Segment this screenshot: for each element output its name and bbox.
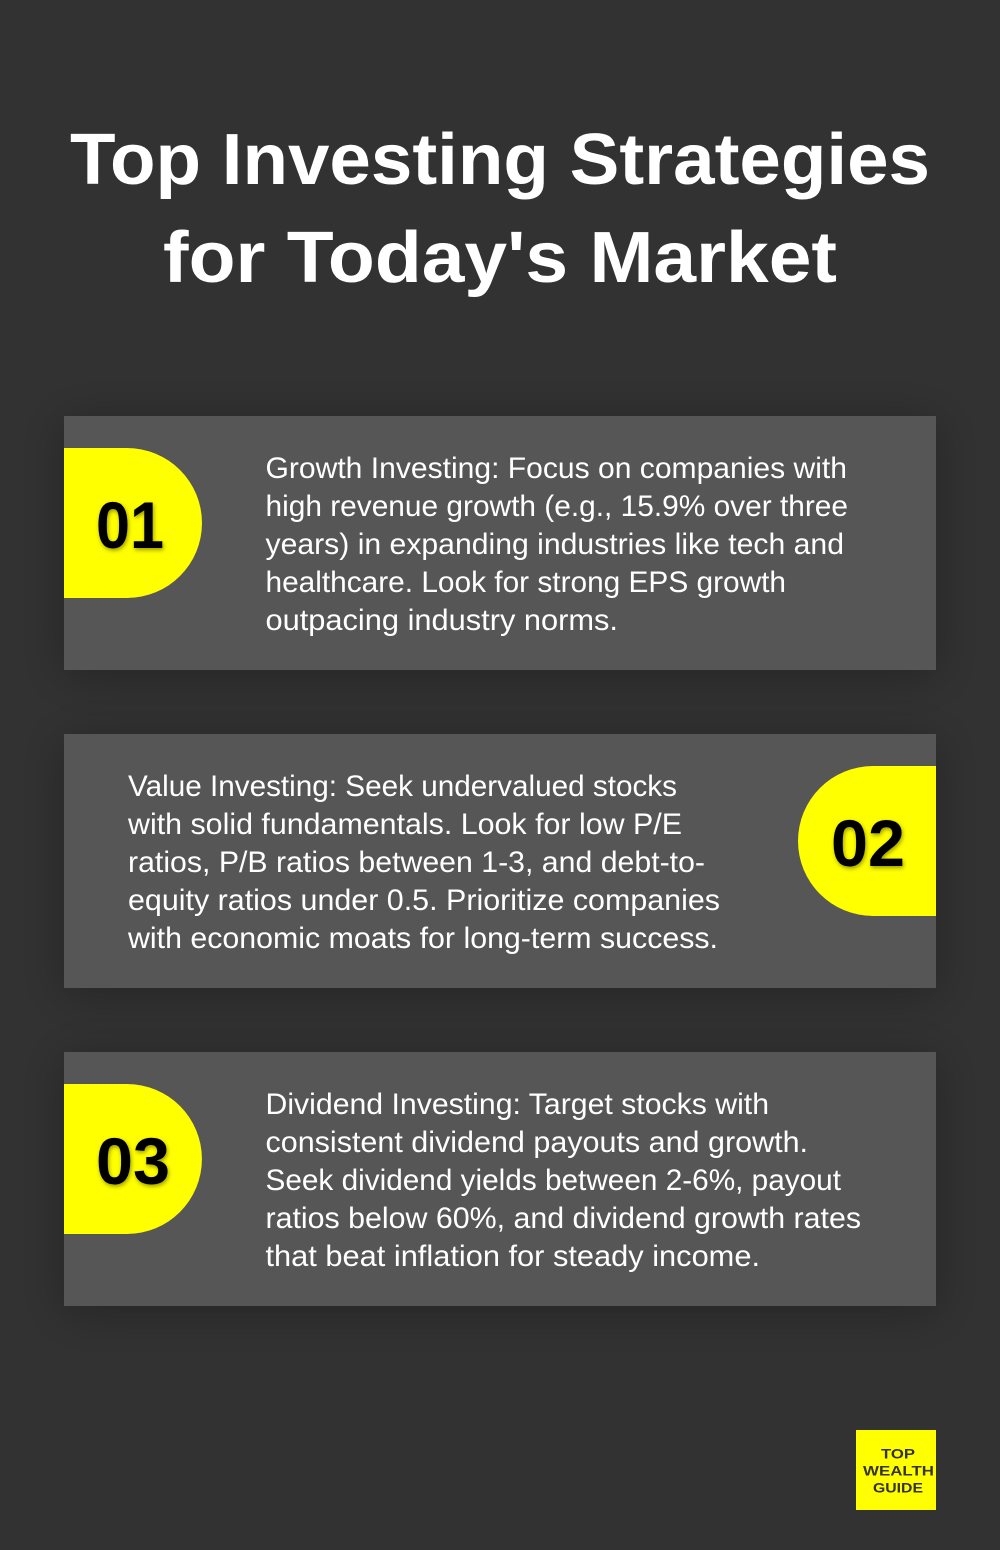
text: value investing description: ratios, P/B ratios between 1-3, and debt-to- (128, 846, 705, 879)
text: dividend investing description (266, 1088, 861, 1273)
logo: Top Wealth Guide: GUIDE (873, 1480, 923, 1496)
title (70, 120, 930, 298)
text: growth investing description (266, 452, 848, 637)
panel: dividend investing (64, 1052, 936, 1306)
text: growth investing description: Growth Investing: Focus on companies with (266, 452, 847, 485)
text: value investing description: equity ratios under 0.5. Prioritize companies (128, 884, 720, 917)
badge: 02 (798, 766, 936, 916)
text: dividend investing description: Seek dividend yields between 2-6%, payout (266, 1164, 842, 1197)
title: Top Investing Strategies (70, 120, 930, 200)
badge: 03 (64, 1084, 202, 1234)
panel: growth investing (64, 416, 936, 670)
badge: 01 (64, 448, 202, 598)
logo: Top Wealth Guide (856, 1430, 936, 1510)
logo: Top Wealth Guide: TOP (881, 1446, 915, 1462)
text: value investing description: with economic moats for long-term success. (127, 922, 718, 955)
text: growth investing description: high revenue growth (e.g., 15.9% over three (266, 490, 848, 523)
badge: 03: 03 (96, 1124, 170, 1198)
title: for Today's Market (163, 218, 837, 298)
text: dividend investing description: ratios below 60%, and dividend growth rates (266, 1202, 861, 1235)
badge: 01: 01 (96, 488, 164, 562)
badge: 02: 02 (831, 806, 905, 880)
text: dividend investing description: Dividend Investing: Target stocks with (266, 1088, 769, 1121)
text: value investing description (127, 770, 720, 955)
logo: Top Wealth Guide: WEALTH (863, 1464, 934, 1478)
text: dividend investing description: consistent dividend payouts and growth. (266, 1126, 808, 1159)
text: dividend investing description: that beat inflation for steady income. (266, 1240, 760, 1273)
text: growth investing description: years) in expanding industries like tech and (266, 528, 844, 561)
text: growth investing description: outpacing industry norms. (266, 604, 618, 637)
text: value investing description: Value Investing: Seek undervalued stocks (128, 770, 677, 803)
panel: value investing (64, 734, 936, 988)
text: value investing description: with solid fundamentals. Look for low P/E (127, 808, 682, 841)
text: growth investing description: healthcare. Look for strong EPS growth (266, 566, 786, 599)
